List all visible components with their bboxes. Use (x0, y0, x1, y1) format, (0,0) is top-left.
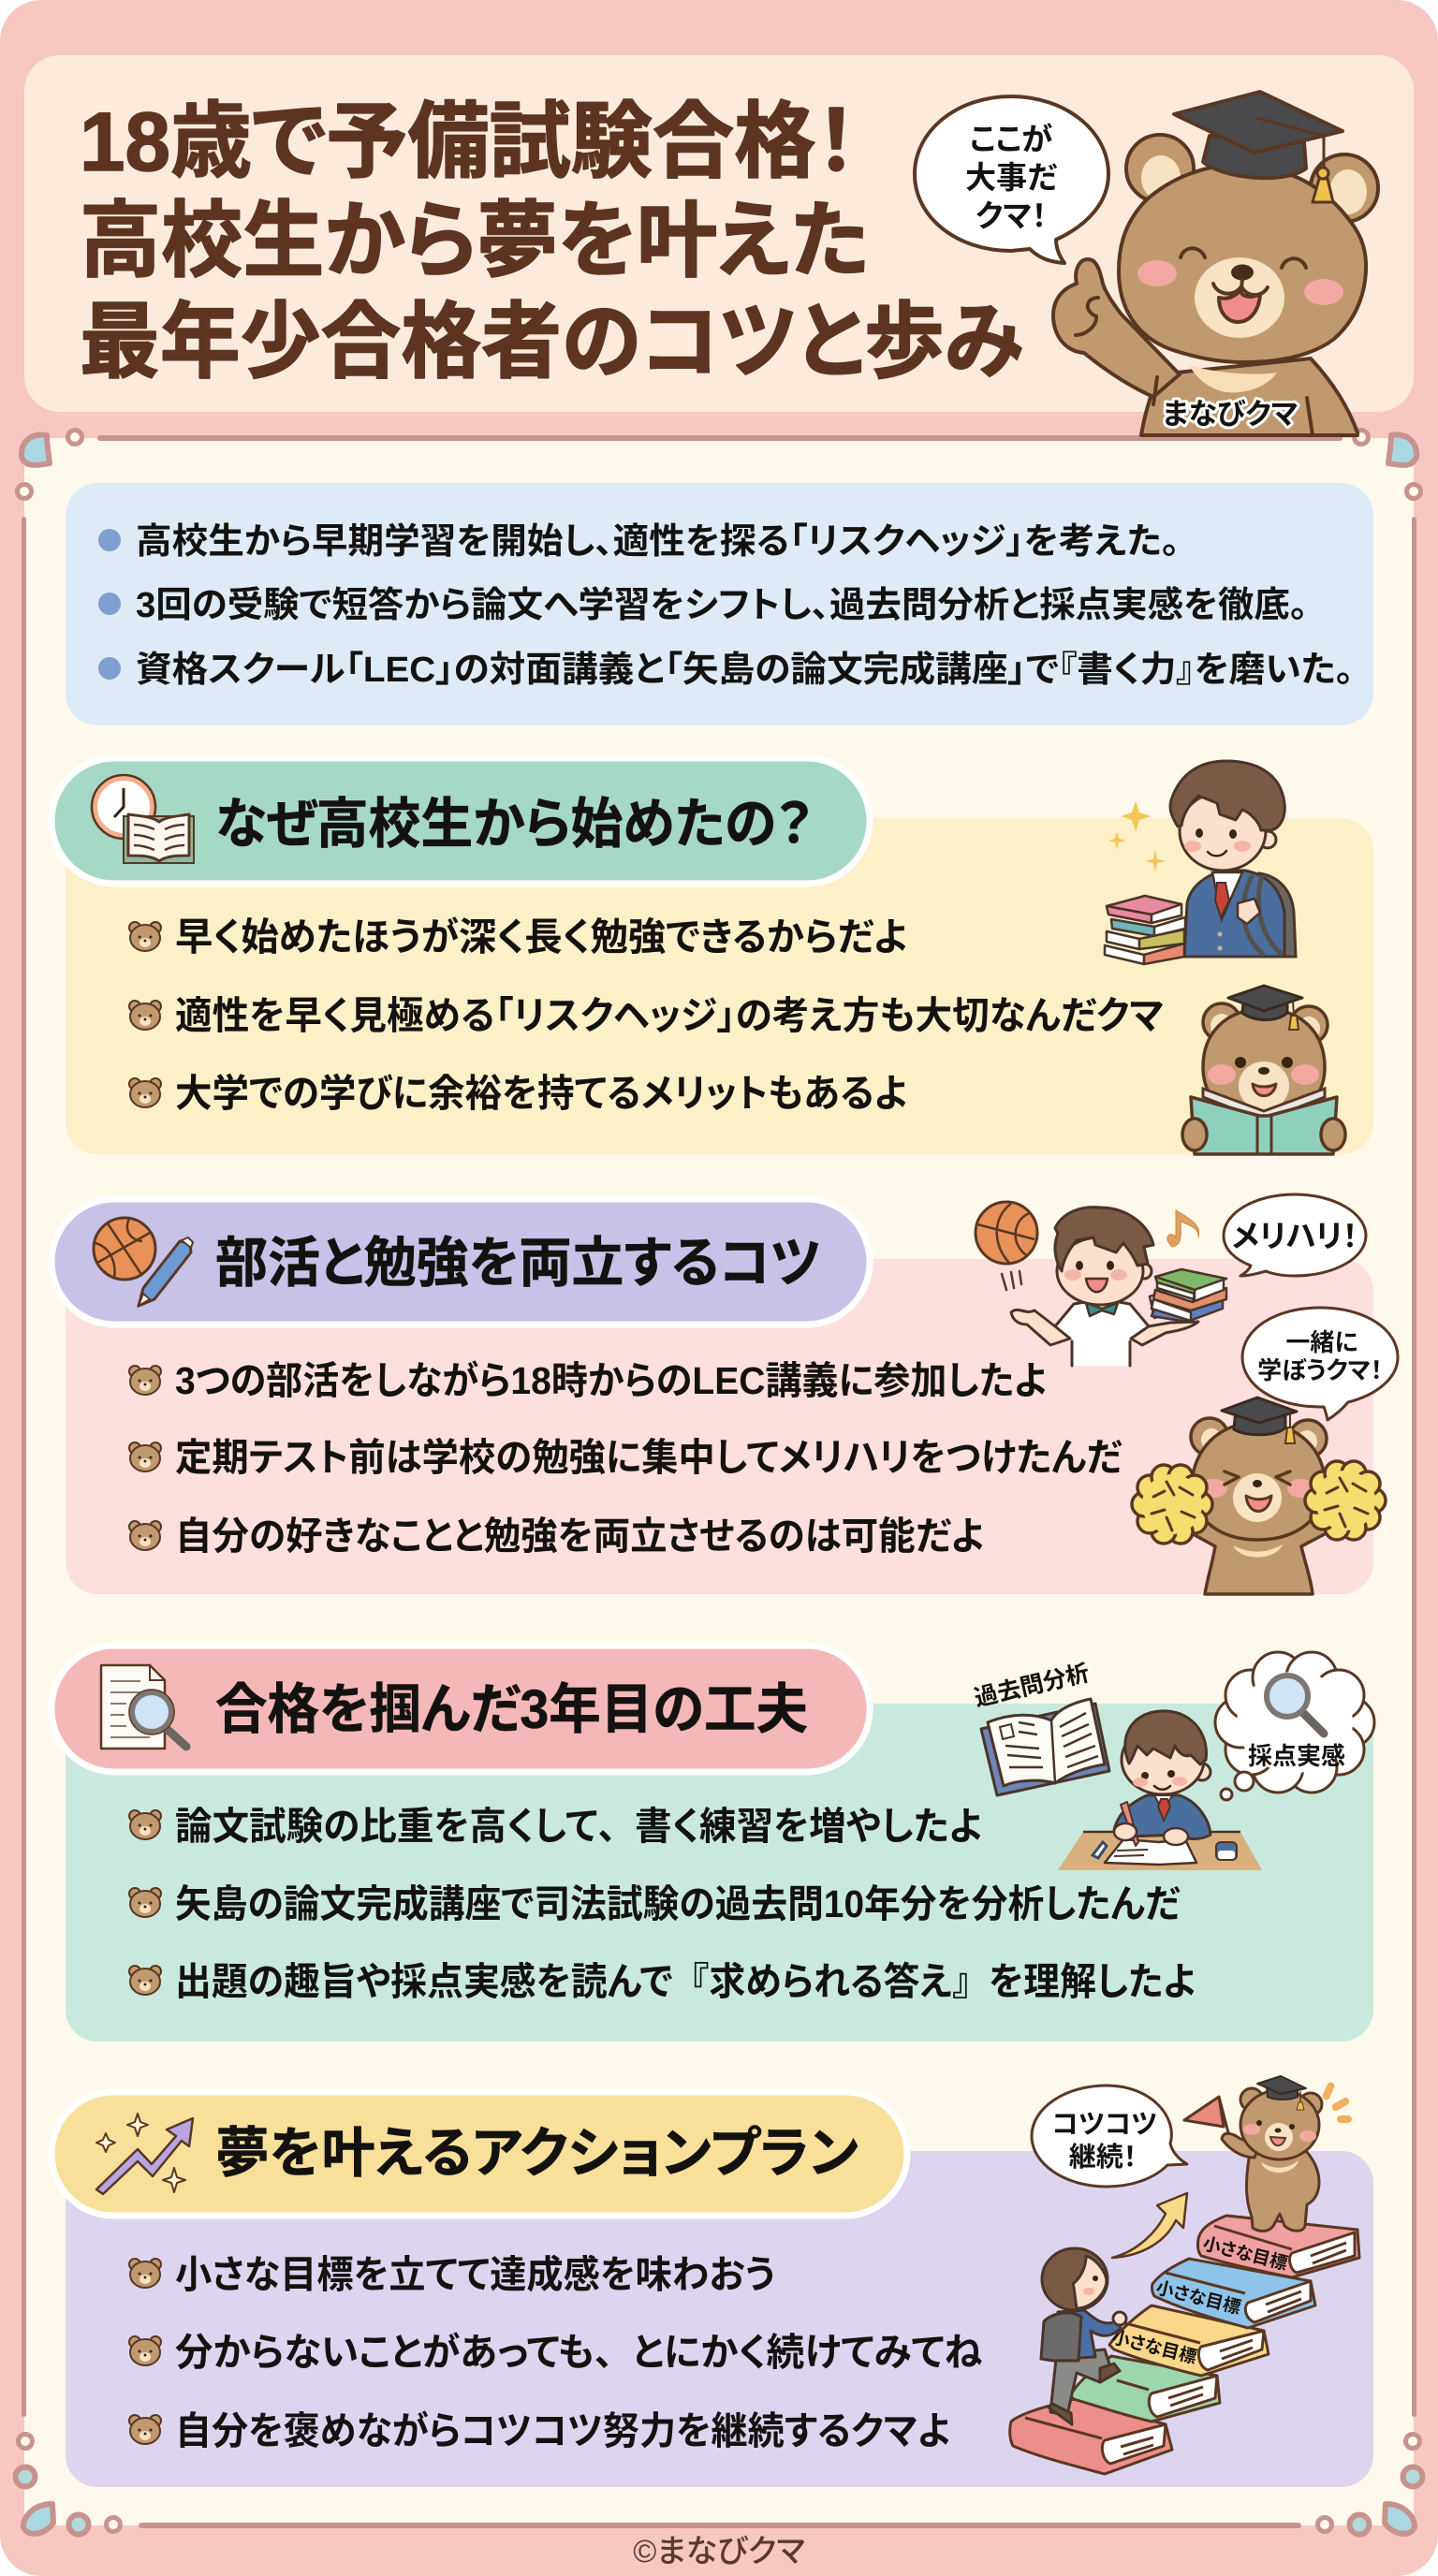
speech bubble: コツコツ継続 (1032, 2086, 1187, 2187)
speech bubble: ここが大事だクマ: 大事だ (965, 160, 1057, 195)
icon: basketball and pen (94, 1218, 193, 1306)
panel: why high school (51, 758, 1373, 1154)
list: 適性を早く見極める「リスクヘッジ」の考え方も大切なんだクマ (175, 994, 1164, 1037)
illustration: cheering bear (1132, 1398, 1386, 1594)
arrow: upward (1112, 2193, 1187, 2258)
heading pill (51, 1646, 870, 1772)
speech bubble: メリハリ (1224, 1194, 1366, 1276)
illustration: boy studying (1058, 1711, 1262, 1870)
list: 大学での学びに余裕を持てるメリットもあるよ (175, 1072, 907, 1115)
book labels (1110, 2233, 1289, 2368)
list: 矢島の論文完成講座で司法試験の過去問10年分を分析したんだ (175, 1882, 1181, 1925)
list: 自分を褒めながらコツコツ努力を継続するクマよ (175, 2409, 950, 2452)
thought cloud: 採点実感 (1215, 1652, 1374, 1800)
icon: document and magnifier (101, 1665, 186, 1749)
label: past exam analysis: 過去問分析 (972, 1660, 1092, 1712)
list: 論文試験の比重を高くして、書く練習を増やしたよ (175, 1805, 982, 1848)
speech bubble: ここが大事だクマ: ここが (970, 122, 1052, 156)
panel: summary: 3回の受験で短答から論文へ学習をシフトし、過去問分析と採点実感を徹底。 (136, 586, 1308, 625)
book labels: 小さな目標 (1154, 2277, 1242, 2319)
heading pill: 合格を掴んだ3年目の工夫 (215, 1679, 808, 1740)
title (80, 95, 1023, 388)
panel: third year (51, 1646, 1374, 2042)
list: 定期テスト前は学校の勉強に集中してメリハリをつけたんだ (175, 1436, 1123, 1479)
speech bubble: 一緒に学ぼうクマ: 一緒に (1285, 1328, 1358, 1356)
list (129, 1359, 1123, 1558)
book labels: 小さな目標 (1201, 2233, 1289, 2275)
list: 出題の趣旨や採点実感を読んで『求められる答え』を理解したよ (175, 1960, 1196, 2003)
list (129, 915, 1164, 1115)
illustration: stacked goal books (1010, 2216, 1359, 2474)
name label: まなびクマ (1163, 398, 1298, 431)
heading pill: 部活と勉強を両立するコツ (215, 1233, 821, 1294)
heading pill (51, 1199, 870, 1325)
heading pill: 夢を叶えるアクションプラン (215, 2123, 858, 2184)
illustration: boy climbing (1041, 2248, 1126, 2424)
illustration: basketball boy with books (976, 1202, 1226, 1366)
list: 小さな目標を立てて達成感を味わおう (175, 2253, 775, 2296)
list: 3つの部活をしながら18時からのLEC講義に参加したよ (175, 1359, 1047, 1402)
list (129, 2253, 982, 2452)
speech bubble: 一緒に学ぼうクマ (1242, 1308, 1398, 1420)
heading pill (51, 2092, 907, 2216)
thought cloud: 採点実感: 採点実感 (1248, 1742, 1345, 1770)
speech bubble: ここが大事だクマ: クマ！ (976, 198, 1047, 233)
panel: action plan (51, 2076, 1373, 2487)
speech bubble: メリハリ: メリハリ！ (1232, 1219, 1357, 1253)
list (129, 1805, 1196, 2003)
book labels: 小さな目標 (1110, 2327, 1198, 2368)
list: 自分の好きなことと勉強を両立させるのは可能だよ (175, 1515, 984, 1558)
list: 分からないことがあっても、とにかく続けてみてね (175, 2331, 982, 2374)
panel: summary: 資格スクール「LEC」の対面講義と「矢島の論文完成講座」で『書く力』を磨いた。 (136, 651, 1354, 690)
illustration: bear reading (1182, 986, 1345, 1154)
heading pill: なぜ高校生から始めたの？ (215, 794, 813, 855)
illustration: student with books (1105, 761, 1296, 964)
icon: rising arrow and sparkles (96, 2114, 193, 2194)
header panel (24, 55, 1414, 412)
list: 早く始めたほうが深く長く勉強できるからだよ (175, 915, 907, 959)
heading pill (51, 758, 870, 884)
illustration: bear with flag (1184, 2076, 1352, 2232)
speech bubble: ここが大事だクマ (915, 96, 1108, 263)
title: 最年少合格者のコツと歩み (80, 295, 1023, 388)
panel: clubs and study (51, 1194, 1398, 1594)
panel: summary: 高校生から早期学習を開始し、適性を探る「リスクヘッジ」を考えた。 (136, 522, 1180, 562)
title: 高校生から夢を叶えた (80, 194, 869, 287)
illustration: open book (981, 1699, 1109, 1795)
title: 18歳で予備試験合格！ (80, 95, 857, 188)
cream content panel (15, 431, 1423, 2535)
footer credit: ©まなびクマ (633, 2534, 805, 2569)
icon: clock and book (92, 775, 194, 863)
panel: summary (66, 483, 1373, 725)
speech bubble: コツコツ継続: コツコツ (1052, 2110, 1157, 2140)
mascot bear with cap (1053, 92, 1378, 435)
speech bubble: コツコツ継続: 継続！ (1069, 2142, 1137, 2173)
speech bubble: 一緒に学ぼうクマ: 学ぼうクマ！ (1257, 1356, 1383, 1384)
